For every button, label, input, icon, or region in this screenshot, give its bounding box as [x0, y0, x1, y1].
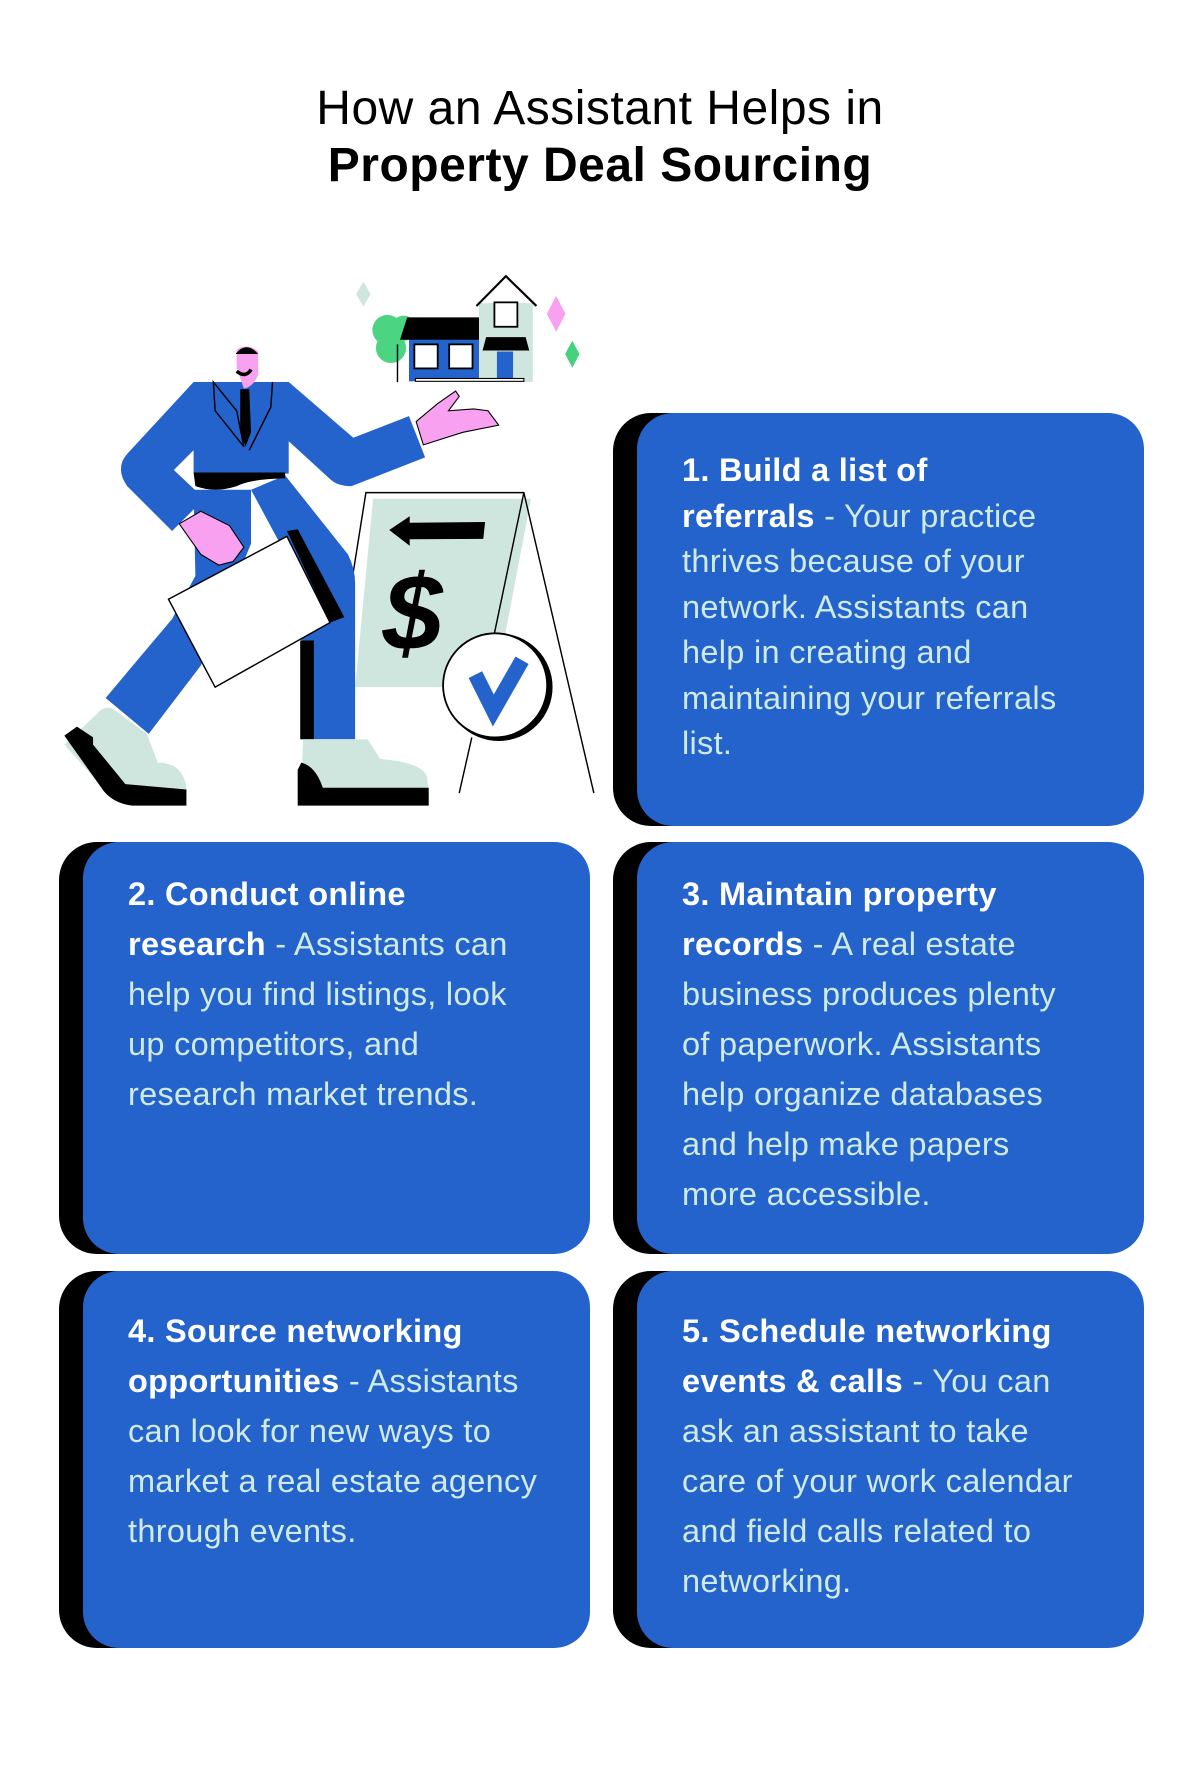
- card 1: build a list of referrals: [613, 413, 1144, 826]
- card 3 text: more accessible.: [682, 1176, 931, 1212]
- card 3 text: 3. Maintain property: [682, 876, 997, 912]
- icon: sparkles: [356, 282, 579, 368]
- title: [316, 82, 884, 192]
- title: How an Assistant Helps in: [316, 82, 884, 135]
- card 4 text: 4. Source networking: [128, 1313, 463, 1349]
- card 5 text: networking.: [682, 1563, 852, 1599]
- card 5 text: 5. Schedule networking: [682, 1313, 1052, 1349]
- illustration: businessman with house and sale sign: [64, 274, 594, 806]
- card 1 text: list.: [682, 725, 732, 761]
- card 3 text: and help make papers: [682, 1126, 1010, 1162]
- card 5: schedule networking events: [613, 1271, 1144, 1648]
- card 4 text: through events.: [128, 1513, 357, 1549]
- card 1 text: referrals - Your practice: [682, 498, 1036, 534]
- sale sign board: $: [382, 552, 444, 672]
- card 4 text: [128, 1313, 537, 1549]
- card 1 text: help in creating and: [682, 634, 972, 670]
- card 3 text: business produces plenty: [682, 976, 1056, 1012]
- sale sign board: [352, 493, 594, 793]
- title: Property Deal Sourcing: [328, 139, 872, 192]
- card 5 text: events & calls - You can: [682, 1363, 1051, 1399]
- card 2 text: 2. Conduct online: [128, 876, 406, 912]
- card 3 text: help organize databases: [682, 1076, 1043, 1112]
- card 2 text: research - Assistants can: [128, 926, 508, 962]
- card 3 text: of paperwork. Assistants: [682, 1026, 1041, 1062]
- card 2 text: research market trends.: [128, 1076, 478, 1112]
- card 2: conduct online research: [59, 842, 590, 1254]
- card 1 text: network. Assistants can: [682, 588, 1028, 624]
- card 4 text: market a real estate agency: [128, 1463, 537, 1499]
- card 5 text: and field calls related to: [682, 1513, 1031, 1549]
- card 5 text: [682, 1313, 1073, 1599]
- card 2 text: [128, 876, 508, 1112]
- businessman: [64, 347, 499, 806]
- card 5 text: care of your work calendar: [682, 1463, 1073, 1499]
- icon: houses and tree: [372, 276, 536, 382]
- card 2 text: help you find listings, look: [128, 976, 507, 1012]
- card 1 text: thrives because of your: [682, 543, 1025, 579]
- card 1 text: 1. Build a list of: [682, 452, 928, 488]
- icon: check circle: [443, 633, 553, 741]
- card 4 text: can look for new ways to: [128, 1413, 491, 1449]
- card 4: source networking opportunities: [59, 1271, 590, 1648]
- card 3 text: records - A real estate: [682, 926, 1016, 962]
- card 3 text: [682, 876, 1056, 1212]
- card 2 text: up competitors, and: [128, 1026, 419, 1062]
- card 3: maintain property records: [613, 842, 1144, 1254]
- card 1 text: [682, 452, 1056, 761]
- card 4 text: opportunities - Assistants: [128, 1363, 519, 1399]
- card 1 text: maintaining your referrals: [682, 680, 1056, 716]
- card 5 text: ask an assistant to take: [682, 1413, 1029, 1449]
